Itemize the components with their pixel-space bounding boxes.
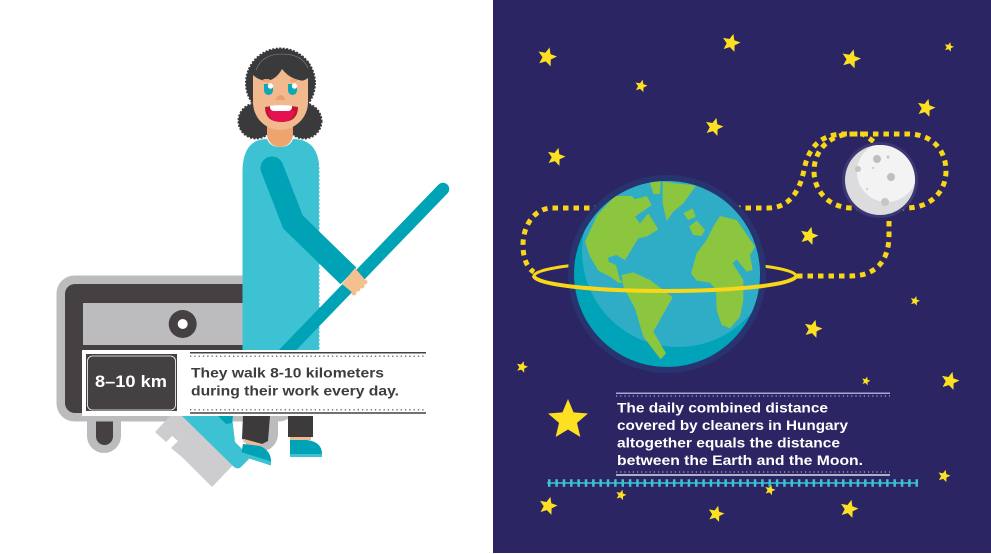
person: arm	[260, 156, 348, 276]
panel: cleaner (left)	[0, 0, 493, 554]
ring front	[534, 276, 796, 291]
label: 8-10 km callout	[82, 350, 427, 416]
dotted route from ring to moon	[797, 210, 889, 276]
badge: 8-10 km	[86, 354, 177, 411]
continents	[585, 180, 755, 359]
ring back	[534, 261, 796, 291]
person: face	[253, 54, 309, 130]
Moon	[842, 142, 918, 218]
caption: Earth to Moon distance: between the Earth and the Moon.	[617, 453, 863, 468]
caption: walking distance	[191, 364, 399, 399]
broom head	[155, 416, 249, 487]
panel: Earth and Moon (right)	[493, 0, 991, 553]
person: hand	[342, 268, 368, 296]
person: body	[242, 139, 320, 350]
Earth	[568, 175, 766, 373]
badge: 8-10 km: 8–10 km	[95, 372, 167, 391]
cleaning machine	[56, 276, 296, 453]
dotted route left of Earth	[523, 208, 600, 272]
person: legs and shoes	[241, 416, 322, 466]
person: neck	[267, 120, 293, 147]
broom stick	[276, 189, 443, 362]
cross-stitch divider	[547, 482, 918, 484]
caption: Earth to Moon distance: covered by cleaners in Hungary	[617, 418, 849, 433]
caption: Earth to Moon distance: The daily combined distance	[617, 401, 829, 416]
stars	[515, 31, 961, 523]
caption: Earth to Moon distance: altogether equals the distance	[617, 436, 841, 451]
caption: Earth to Moon distance	[616, 393, 890, 475]
dotted route around the moon	[735, 134, 946, 208]
person: hair back	[238, 48, 322, 138]
caption: walking distance: during their work every day.	[191, 383, 399, 399]
caption: walking distance: They walk 8-10 kilometers	[191, 364, 384, 380]
